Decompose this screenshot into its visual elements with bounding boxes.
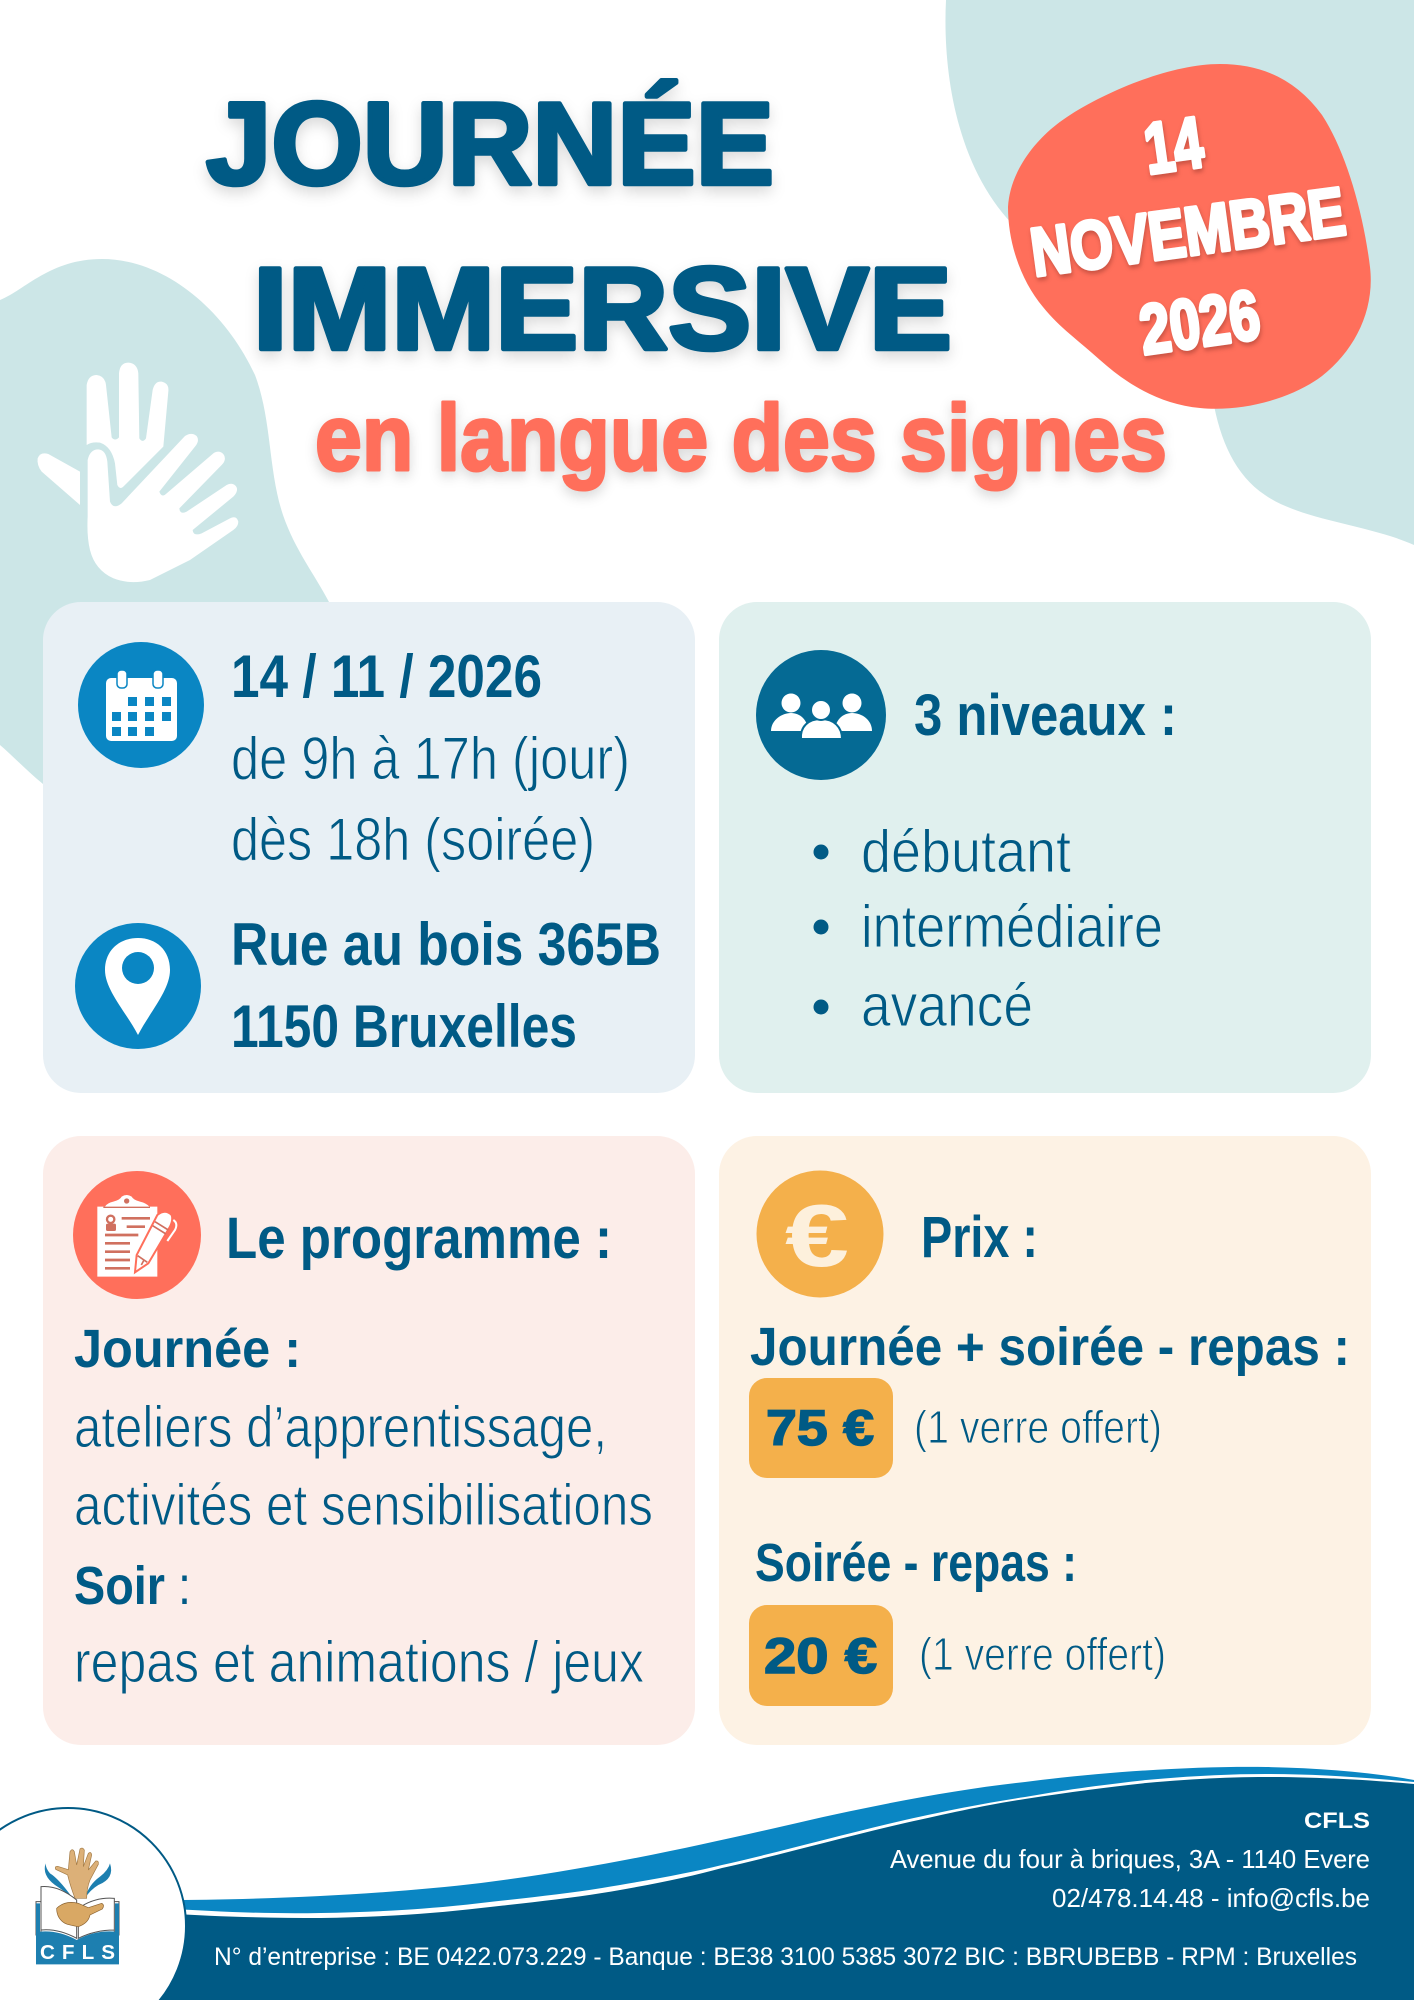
heading: prices: Prix : [921,1205,1038,1270]
logo: flames [45,1863,111,1898]
subtitle: en langue des signes [315,385,1167,490]
date: 14 / 11 / 2026 [231,643,542,710]
level list [814,818,1163,1039]
programme: day: Journée : [74,1319,301,1379]
heading: programme: Le programme : [226,1206,612,1271]
address: Rue au bois 365B [231,911,661,978]
price tag: 75 euros [749,1378,893,1478]
footer wave [160,1767,1414,2000]
footer contact: Avenue du four à briques, 3A - 1140 Evere [890,1844,1370,1874]
background blob: left [0,259,329,800]
price tag: 20 euros: 20 € [764,1628,877,1684]
programme: day: activités et sensibilisations [74,1473,653,1538]
address: 1150 Bruxelles [231,993,577,1060]
programme: day: ateliers d’apprentissage, [74,1395,607,1460]
hours: evening: dès 18h (soirée) [231,806,595,873]
logo: signing hands [57,1902,104,1927]
date badge text: 14 [1139,103,1208,190]
panel: programme [43,1136,695,1745]
programme: evening: repas et animations / jeux [74,1630,644,1695]
logo badge [0,1808,186,2000]
address [231,911,661,1060]
footer contact: CFLS [1304,1808,1370,1833]
background blob: top right [945,0,1414,545]
programme: day [74,1319,653,1538]
logo: open book [36,1886,119,1938]
date badge text: NOVEMBRE [1026,173,1350,291]
icon: calendar [78,642,204,768]
footer legal line: N° d’entreprise : BE 0422.073.229 - Banque : BE38 3100 5385 3072 BIC : BBRUBEBB - RPM : Bruxelles [214,1943,1357,1971]
icon: euro: € [785,1186,849,1285]
price label: evening: Soirée - repas : [755,1533,1077,1593]
icon: group of people [756,650,886,780]
icon: euro [756,1170,884,1298]
logo: name plate: CFLS [40,1941,115,1964]
icon: clipboard and pen [73,1171,201,1299]
title: IMMERSIVE [253,243,952,374]
level list: avancé [861,972,1033,1039]
logo: raised hand [55,1848,98,1898]
icon: location pin [75,923,201,1049]
price tag: 20 euros [749,1605,893,1706]
date badge text [1026,103,1350,369]
level list: débutant [861,818,1071,885]
icon: white hands [37,363,238,582]
panel: levels [719,602,1371,1093]
note: drink included: (1 verre offert) [919,1628,1166,1680]
footer contact: 02/478.14.48 - info@cfls.be [1052,1883,1370,1913]
hours: day: de 9h à 17h (jour) [231,725,630,792]
date badge [1008,64,1371,409]
footer contact [890,1808,1370,1913]
title [206,78,952,374]
price label: day and evening: Journée + soirée - repas : [750,1317,1350,1377]
price tag: 75 euros: 75 € [766,1400,874,1456]
programme: evening: Soir : [74,1556,191,1616]
panel: date and place [43,602,695,1093]
date badge text: 2026 [1135,275,1265,369]
panel: prices [719,1136,1371,1745]
title: JOURNÉE [206,78,774,209]
note: drink included: (1 verre offert) [914,1401,1162,1453]
programme: evening [74,1556,644,1695]
heading: levels: 3 niveaux : [914,683,1177,748]
level list: intermédiaire [861,893,1163,960]
